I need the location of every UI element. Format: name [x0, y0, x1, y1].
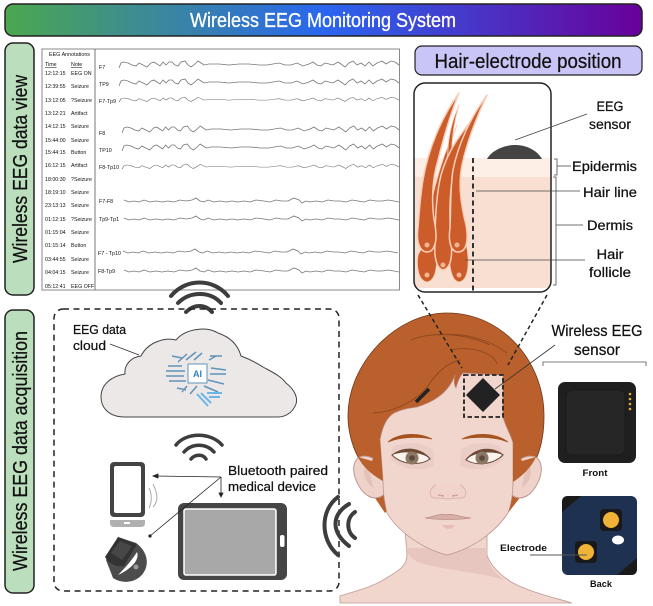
device: back: Back — [590, 579, 613, 590]
annotations table: Seizure — [71, 124, 89, 130]
annotations table: Note — [71, 62, 82, 68]
channel labels: TP10 — [99, 148, 112, 154]
channel labels: F8 — [99, 131, 105, 137]
EEG traces — [119, 61, 399, 273]
AI brain: AI — [193, 369, 202, 379]
label: EEG data cloud: cloud — [73, 338, 106, 353]
hair side tips over ears — [358, 440, 536, 482]
dashed sensor area with sensor — [464, 345, 555, 417]
icon: smartwatch — [105, 537, 147, 582]
icon: smartphone — [110, 462, 157, 527]
annotations table: 13:12:21 — [45, 111, 66, 117]
label: Bluetooth paired medical device: Bluetooth paired — [228, 463, 328, 478]
annotations table: Seizure — [71, 190, 89, 196]
cloud — [101, 329, 297, 417]
panel: hair-electrode position title — [415, 46, 642, 75]
labels: cross-section: Hair line — [583, 185, 637, 200]
title bar — [5, 4, 642, 36]
annotations table: 01:12:15 — [45, 217, 66, 223]
middle follicle — [435, 117, 474, 270]
channel labels: F8-Tp9 — [98, 269, 115, 275]
icon: tablet — [178, 503, 287, 580]
side label: Wireless EEG data view — [5, 43, 34, 295]
channel labels: F7-F8 — [99, 199, 113, 205]
labels: cross-section: follicle — [589, 265, 631, 280]
labels: cross-section: Hair — [596, 247, 624, 262]
channel labels: TP9 — [99, 82, 109, 88]
lower-left follicle — [417, 125, 457, 282]
upper-left follicle — [417, 93, 459, 252]
labels: cross-section: Dermis — [587, 218, 633, 233]
follicle bulbs — [424, 242, 462, 278]
annotations table: Seizure — [71, 270, 89, 276]
panel: hair-electrode position title: Hair-electrode position — [434, 51, 622, 73]
labels: cross-section: EEG — [596, 99, 624, 114]
annotations table: 04:04:15 — [45, 270, 66, 276]
title bar: Wireless EEG Monitoring System — [190, 10, 456, 32]
annotations table: 18:00:30 — [45, 177, 66, 183]
label: Wireless EEG sensor: Wireless EEG — [552, 323, 642, 340]
annotations table: 23:13:13 — [45, 203, 66, 209]
shoulders and neck — [340, 530, 572, 603]
labels: cross-section — [465, 99, 637, 285]
nose — [430, 485, 466, 499]
label: EEG data cloud: EEG data — [73, 322, 127, 337]
lower-right follicle — [448, 105, 468, 282]
annotations table: 14:12:15 — [45, 124, 66, 130]
wifi icon: top — [171, 282, 228, 312]
label: Wireless EEG sensor: sensor — [574, 342, 621, 359]
face skin — [380, 373, 513, 555]
annotations table: Artifact — [71, 111, 88, 117]
annotations table: EEG ON — [71, 71, 92, 77]
annotations table: 16:12:15 — [45, 163, 66, 169]
annotations table: ?Seizure — [71, 217, 92, 223]
hair line dashed — [472, 158, 474, 291]
annotations table: 18:19:10 — [45, 190, 66, 196]
annotations table: EEG OFF — [71, 284, 95, 290]
channel labels: F7 - Tp10 — [98, 251, 121, 257]
label: Wireless EEG sensor — [543, 323, 646, 366]
annotations table: Button — [71, 243, 86, 249]
dashed box: EEG data acquisition — [54, 309, 339, 591]
annotations table: 01:15:04 — [45, 230, 66, 236]
annotations table: 12:12:15 — [45, 71, 66, 77]
panel: hair cross-section — [414, 83, 551, 292]
label: Electrode: Electrode — [500, 543, 547, 554]
arrows: Bluetooth — [149, 474, 223, 537]
upper-right follicle — [449, 95, 487, 252]
label: Bluetooth paired medical device — [228, 463, 328, 494]
hair clip — [416, 389, 429, 402]
EEG sensor dome — [487, 145, 542, 159]
annotations table: Seizure — [71, 257, 89, 263]
side label: Wireless EEG data acquisition: Wireless EEG data acquisition — [10, 331, 32, 571]
hair back — [373, 490, 522, 513]
zoom connector lines — [418, 295, 547, 368]
annotations table: 15:44:00 — [45, 138, 66, 144]
device: back — [562, 496, 637, 590]
wifi icon: right of dashed box — [324, 497, 355, 555]
device: front: Front — [582, 468, 608, 479]
hair strands and follicles — [417, 93, 487, 282]
annotations table: 05:12:41 — [45, 284, 66, 290]
channel labels — [98, 65, 121, 275]
annotations table: Seizure — [71, 203, 89, 209]
annotations table: 03:44:55 — [45, 257, 66, 263]
channel labels: F7-Tp9 — [99, 99, 116, 105]
annotations table: Time — [45, 62, 57, 68]
annotations table: 13:12:05 — [45, 98, 66, 104]
hair strands — [373, 334, 507, 413]
wifi icon: middle — [176, 435, 222, 459]
annotations table: EEG Annotations — [49, 52, 90, 58]
channel labels: F7 — [99, 65, 105, 71]
annotations table: ?Seizure — [71, 177, 92, 183]
AI brain — [166, 352, 226, 406]
channel labels: Tp9-Tp1 — [99, 217, 119, 223]
ears — [354, 456, 392, 498]
labels: cross-section: sensor — [589, 117, 632, 132]
mouth — [425, 514, 471, 520]
annotations table: Seizure — [71, 230, 89, 236]
labels: cross-section: Epidermis — [572, 159, 637, 174]
annotations table: Seizure — [71, 84, 89, 90]
illustration: face — [340, 313, 572, 603]
label: Bluetooth paired medical device: medical device — [228, 479, 316, 494]
eyes — [392, 450, 503, 464]
side label: Wireless EEG data acquisition — [5, 310, 34, 593]
channel labels: F8-Tp10 — [99, 165, 119, 171]
device: front — [558, 382, 636, 479]
annotations table: 15:44:15 — [45, 150, 66, 156]
annotations table: Button — [71, 150, 86, 156]
annotations table: Seizure — [71, 138, 89, 144]
annotations table: ?Seizure — [71, 98, 92, 104]
annotations table: 12:39:55 — [45, 84, 66, 90]
eye shading — [390, 443, 504, 469]
annotations table: Artifact — [71, 163, 88, 169]
eyebrows — [388, 434, 508, 442]
label: Electrode — [500, 543, 587, 555]
panel: EEG data view — [42, 49, 400, 290]
side label: Wireless EEG data view: Wireless EEG data view — [10, 75, 32, 263]
annotations table: 01:15:14 — [45, 243, 66, 249]
label: EEG data cloud — [73, 322, 139, 355]
annotations table — [45, 52, 95, 290]
